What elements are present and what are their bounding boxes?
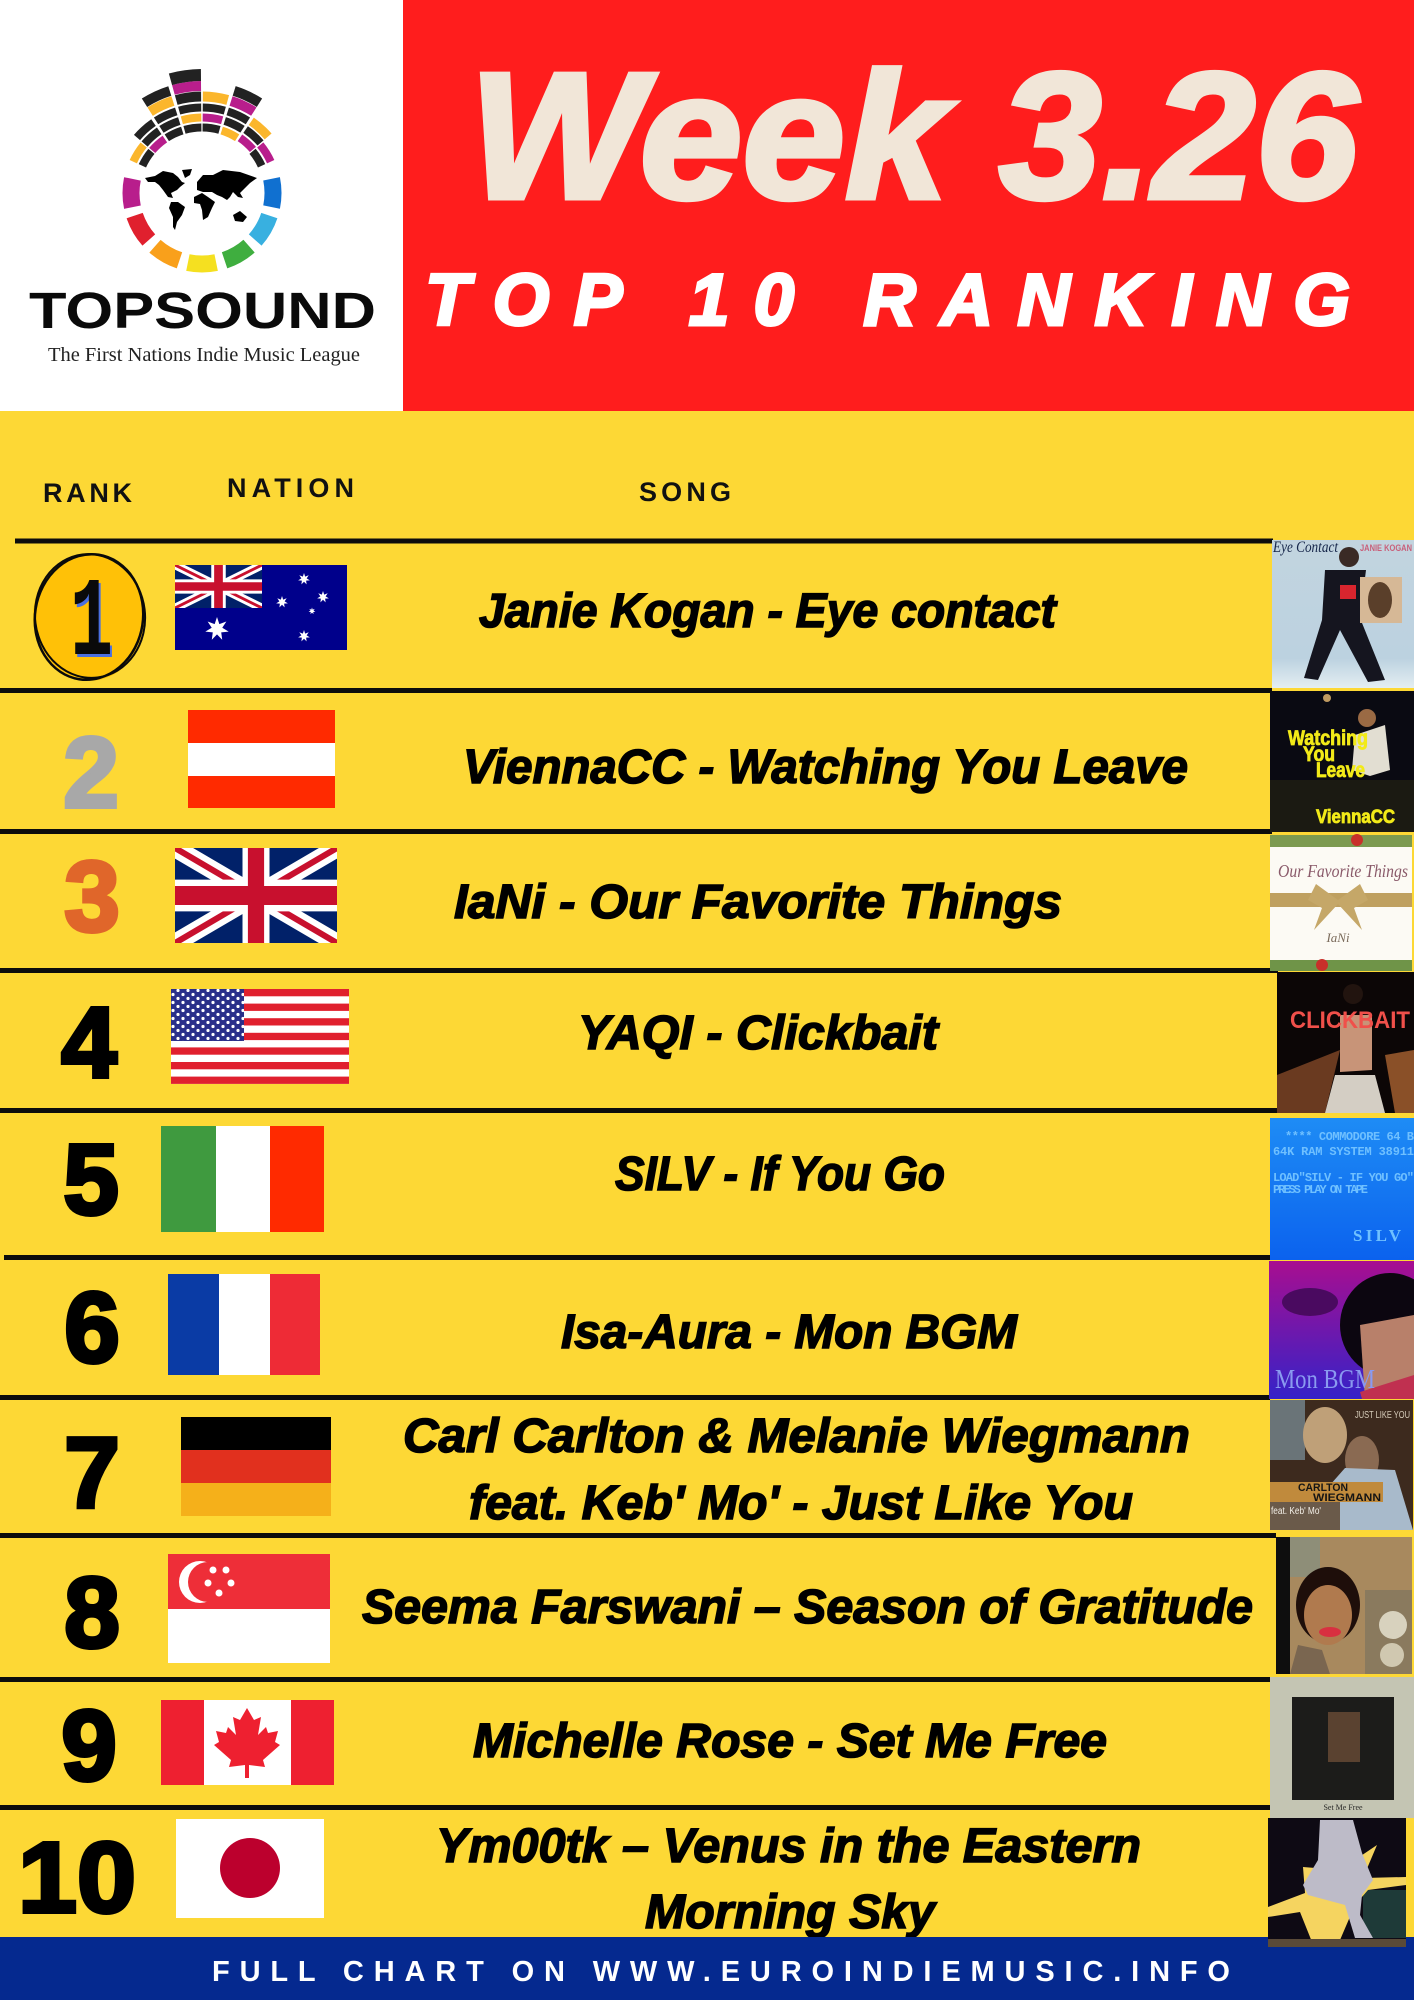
cover 9 [1270, 1677, 1414, 1818]
rank 2 row [63, 691, 1414, 832]
table column headers: SONG [639, 477, 731, 507]
cover 6: Mon BGM [1275, 1364, 1375, 1394]
rank number 7: 7 [64, 1417, 120, 1529]
subtitle: top 10 ranking: TOP 10 RANKING [425, 260, 1350, 341]
wordmark: TOPSOUND: TOPSOUND [29, 282, 376, 339]
rank number 9: 9 [61, 1690, 117, 1802]
cover 5 [1270, 1118, 1414, 1260]
song 7 [403, 1410, 1190, 1530]
song 10 [436, 1820, 1141, 1939]
rank 5 row [63, 1118, 1414, 1260]
table column headers: RANK [43, 478, 132, 508]
icon: topsound logo [54, 45, 350, 341]
rank 1 row [26, 539, 1414, 688]
song 8: Seema Farswani – Season of Gratitude [362, 1581, 1253, 1634]
flag: Japan [176, 1819, 324, 1918]
tagline: The First Nations Indie Music League [48, 344, 360, 366]
flag: Australia [175, 565, 347, 650]
cover 5: PRESS PLAY ON TAPE [1273, 1183, 1368, 1197]
song 3: IaNi - Our Favorite Things [454, 876, 1062, 929]
flag: France [168, 1274, 320, 1375]
header: red title panel [403, 0, 1414, 411]
flag: Singapore [168, 1554, 330, 1663]
cover 4 [1277, 972, 1414, 1113]
rank number 4: 4 [61, 987, 117, 1099]
rank number 8: 8 [64, 1557, 120, 1669]
title: week: Week 3.26 [469, 36, 1360, 237]
cover 9: Set Me Free [1323, 1803, 1363, 1812]
rank number 3: 3 [64, 841, 120, 953]
cover 3 [1270, 834, 1412, 971]
rank 6 row [64, 1261, 1414, 1399]
flag: Canada [161, 1700, 334, 1785]
song 10: Ym00tk – Venus in the Eastern [436, 1820, 1141, 1873]
rank badge 1 [26, 546, 152, 688]
cover 7: CARLTON [1298, 1482, 1348, 1494]
rank badge 1: 1 [70, 561, 113, 688]
cover 2 [1270, 691, 1414, 832]
cover 2: Watching [1288, 727, 1368, 750]
flag: United Kingdom [175, 848, 337, 943]
song 4: YAQI - Clickbait [578, 1007, 940, 1060]
song 10: Morning Sky [645, 1886, 937, 1939]
cover 10 [1268, 1818, 1406, 1947]
row divider lines [0, 538, 1278, 1810]
cover 5: LOAD"SILV - IF YOU GO" [1273, 1171, 1414, 1185]
rank number 6: 6 [64, 1272, 120, 1384]
footer bar [0, 1937, 1414, 2000]
cover 2: Leave [1316, 759, 1365, 782]
table column headers: NATION [227, 473, 354, 503]
song 7: feat. Keb' Mo' - Just Like You [469, 1477, 1133, 1530]
cover 1 [1272, 539, 1414, 688]
rank 7 row [64, 1400, 1413, 1530]
cover 8 [1276, 1537, 1412, 1674]
song 1: Janie Kogan - Eye contact [479, 585, 1058, 638]
cover 6 [1269, 1261, 1414, 1399]
icon: world map [145, 169, 257, 230]
cover 2: You [1303, 743, 1335, 766]
flag: Austria [188, 710, 335, 808]
cover 7 [1270, 1400, 1413, 1530]
rank 8 row [64, 1537, 1412, 1674]
header: logo panel [0, 0, 403, 411]
flag: United States [171, 989, 349, 1084]
rank number 10: 10 [18, 1822, 136, 1934]
cover 7: WIEGMANN [1313, 1492, 1381, 1504]
flag: Germany [181, 1417, 331, 1516]
song 7: Carl Carlton & Melanie Wiegmann [403, 1410, 1190, 1463]
song 9: Michelle Rose - Set Me Free [473, 1715, 1107, 1768]
cover 2: ViennaCC [1316, 807, 1395, 828]
flag: Italy [161, 1126, 324, 1232]
rank 10 row [18, 1819, 1141, 1939]
table column headers [43, 473, 731, 508]
cover 7: feat. Keb' Mo' [1271, 1506, 1321, 1517]
song 5: SILV - If You Go [615, 1148, 945, 1201]
cover 1: Eye Contact [1272, 539, 1338, 556]
song 2: ViennaCC - Watching You Leave [463, 741, 1188, 794]
song 6: Isa-Aura - Mon BGM [561, 1306, 1018, 1359]
cover 5: 64K RAM SYSTEM 38911 [1273, 1145, 1414, 1159]
rank 3 row [64, 834, 1412, 971]
rank number 5: 5 [63, 1124, 119, 1236]
footer bar: FULL CHART ON WWW.EUROINDIEMUSIC.INFO [212, 1956, 1230, 1988]
rank number 2: 2 [63, 717, 119, 829]
cover 3: IaNi [1325, 930, 1350, 945]
rank 4 row [61, 972, 1414, 1113]
rank 9 row [61, 1677, 1414, 1818]
cover 5: SILV [1353, 1226, 1402, 1245]
cover 5: **** COMMODORE 64 B [1285, 1130, 1414, 1144]
